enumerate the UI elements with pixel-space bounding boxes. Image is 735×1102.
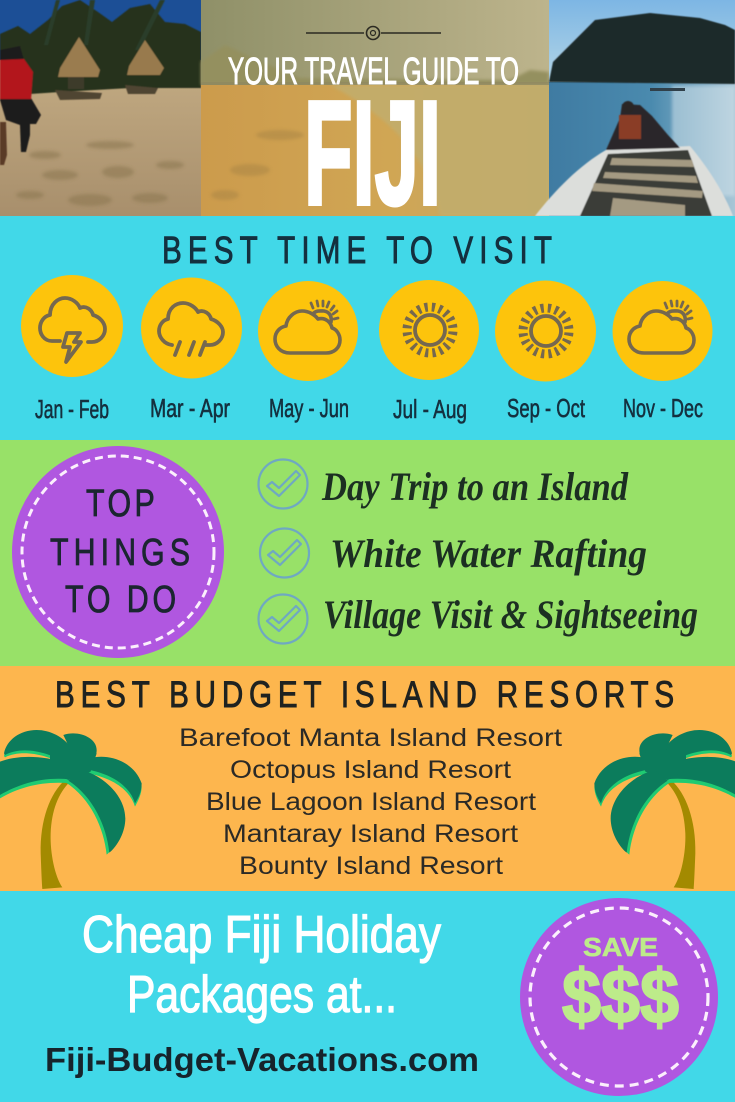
photo: overlay on shore (201, 0, 549, 216)
panel: best budget island resorts (0, 666, 735, 891)
photo: beach with huts (0, 0, 201, 216)
month: jan-feb storm (21, 275, 123, 377)
list: resorts: Mantaray Island Resort (223, 820, 518, 848)
badge: top things to do: TOP (86, 483, 155, 525)
month: nov-dec partly sunny (612, 281, 712, 381)
list: resorts: Bounty Island Resort (239, 852, 503, 880)
badge: save money: $$$ (562, 955, 679, 1040)
month: sep-oct sun (495, 280, 596, 382)
badge: top things to do: THINGS (50, 532, 190, 574)
labels: months (35, 393, 703, 424)
labels: months: Jul - Aug (393, 394, 467, 424)
title: your travel guide to: YOUR TRAVEL GUIDE TO (228, 51, 519, 93)
labels: months: Mar - Apr (150, 393, 230, 423)
text: cheap fiji holiday: Cheap Fiji Holiday (82, 906, 441, 964)
badge: save money (520, 898, 718, 1096)
month: may-jun partly sunny (258, 281, 358, 381)
list: resorts: Blue Lagoon Island Resort (206, 788, 536, 816)
icon: check 3 (258, 594, 308, 644)
badge: top things to do: TO DO (65, 579, 176, 621)
month: mar-apr rain (141, 278, 242, 378)
month: jul-aug sun (379, 280, 479, 380)
panel: top things to do (0, 440, 735, 666)
title: fiji: FIJI (304, 71, 441, 236)
photo: boat on water (535, 0, 735, 216)
text: website: Fiji-Budget-Vacations.com (45, 1041, 479, 1078)
text: white water rafting: White Water Rafting (330, 531, 647, 576)
badge: save money: SAVE (583, 932, 658, 962)
icon: check 1 (258, 460, 308, 508)
panel: header photo collage (0, 0, 735, 236)
list: resorts (179, 724, 562, 880)
heading: best budget island resorts: BEST BUDGET ISLAND RESORTS (55, 675, 674, 716)
badge: top things to do (12, 446, 224, 658)
labels: months: Sep - Oct (507, 393, 586, 423)
panel: best time to visit (0, 216, 735, 440)
list: resorts: Octopus Island Resort (230, 756, 511, 784)
icon: check 2 (260, 528, 309, 578)
icon: right palm tree (594, 730, 735, 889)
title ornament (306, 26, 441, 40)
text: packages at: Packages at... (127, 966, 397, 1024)
labels: months: Jan - Feb (35, 394, 109, 424)
heading: best time to visit: BEST TIME TO VISIT (162, 230, 552, 272)
icon: person in red shirt (0, 59, 41, 152)
list: resorts: Barefoot Manta Island Resort (179, 724, 562, 752)
icon: left palm tree (0, 730, 142, 889)
labels: months: May - Jun (269, 393, 349, 423)
panel: holiday packages call to action (0, 891, 735, 1102)
text: day trip: Day Trip to an Island (321, 464, 629, 509)
